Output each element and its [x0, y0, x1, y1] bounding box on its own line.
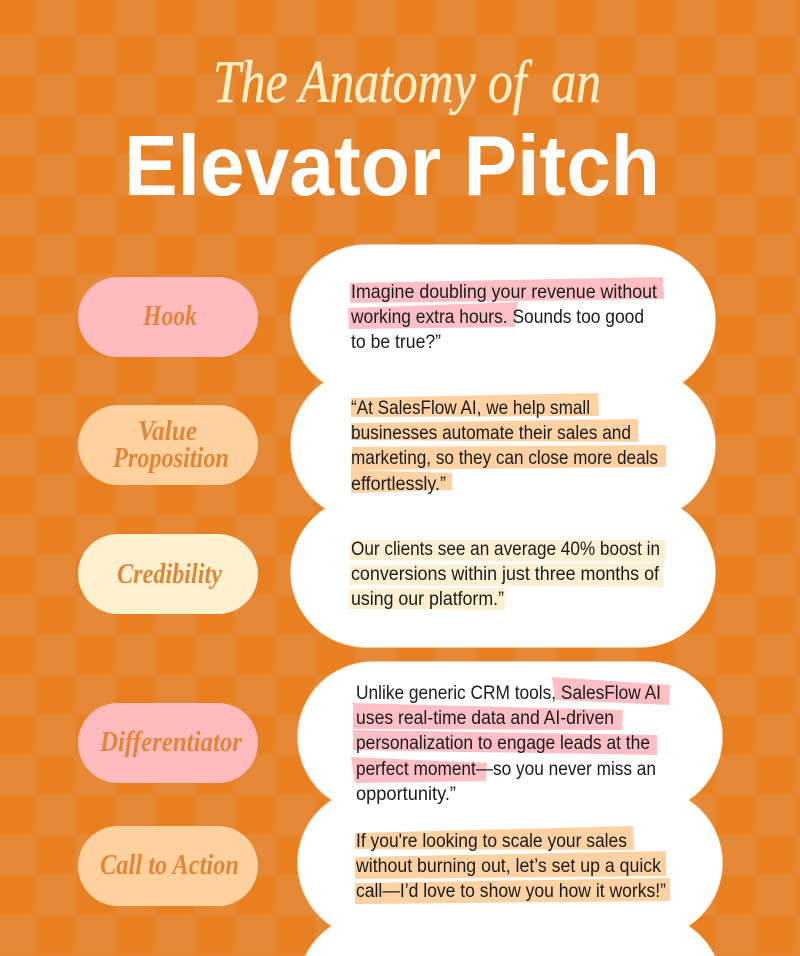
text block: credibility: using our platform.”: [351, 589, 504, 610]
text block: hook: working extra hours. Sounds too good: [350, 307, 644, 328]
text block: differentiator: [351, 677, 670, 805]
text block: differentiator: perfect moment—so you never miss an: [356, 759, 656, 780]
label pill: Differentiator: [78, 703, 258, 783]
text block: differentiator: personalization to engage leads at the: [356, 733, 650, 754]
title line: The Anatomy of an: The Anatomy of an: [213, 49, 601, 115]
text block: value proposition: effortlessly.”: [351, 474, 446, 495]
text block: hook: to be true?”: [351, 332, 441, 353]
text block: differentiator: Unlike generic CRM tools, SalesFlow AI: [356, 683, 661, 704]
text block: credibility: Our clients see an average 40% boost in: [351, 539, 660, 560]
label pill: Value Proposition: Value: [138, 415, 197, 447]
text block: call to action: without burning out, let’s set up a quick: [355, 856, 661, 877]
title: [124, 49, 660, 214]
label pill: Hook: Hook: [142, 300, 197, 332]
text block: call to action: If you're looking to scale your sales: [356, 831, 627, 852]
panel: stacked white speech bubbles: [291, 245, 722, 956]
text block: credibility: [349, 539, 665, 610]
text block: credibility: conversions within just three months of: [351, 564, 660, 585]
text block: hook: Imagine doubling your revenue without: [351, 282, 658, 303]
title line: Elevator Pitch: Elevator Pitch: [124, 119, 660, 214]
label pill: Value Proposition: Proposition: [112, 442, 229, 474]
text block: differentiator: opportunity.”: [356, 784, 456, 805]
label pill: Differentiator: Differentiator: [99, 726, 243, 758]
label pill: Credibility: [78, 534, 258, 614]
text block: call to action: [355, 826, 670, 904]
label pill: Call to Action: Call to Action: [100, 849, 239, 881]
text block: hook: [348, 277, 664, 353]
label pill: Call to Action: [78, 826, 258, 906]
text block: call to action: call—I’d love to show you how it works!”: [356, 881, 666, 902]
text block: differentiator: uses real-time data and AI-driven: [356, 708, 614, 729]
label pill: Value Proposition: [78, 405, 258, 485]
text block: value proposition: marketing, so they can close more deals: [351, 448, 658, 469]
label pill: Hook: [78, 277, 258, 357]
text block: value proposition: [351, 393, 666, 495]
label pill: Credibility: Credibility: [117, 558, 222, 590]
text block: value proposition: businesses automate their sales and: [351, 423, 631, 444]
text block: value proposition: “At SalesFlow AI, we help small: [351, 398, 590, 419]
